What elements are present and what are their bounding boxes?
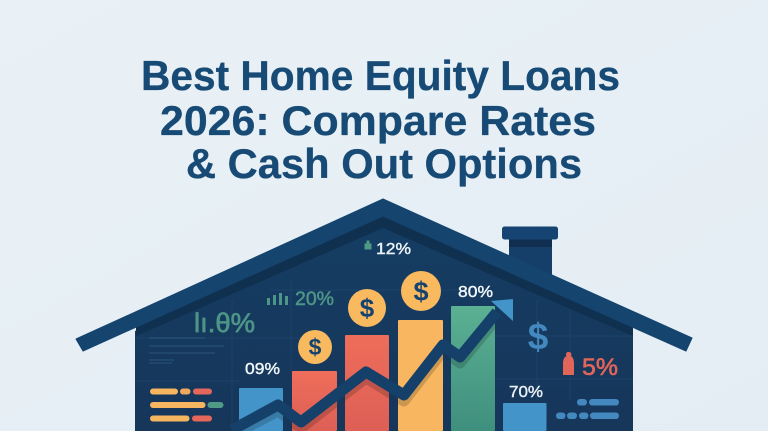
right pill rows [556,399,619,419]
bar: red tall [345,335,389,431]
bar: green [451,306,495,431]
bar chart [239,306,546,431]
roof [76,199,692,351]
stat: 12% with icon: 12% [376,241,411,258]
stat: 5% with icon [563,352,618,381]
trend line [232,312,497,430]
label 80%: 80% [458,284,493,301]
house wall [135,212,633,431]
stat: 5% with icon: 5% [582,354,618,381]
title: Best Home Equity Loans [141,52,620,99]
title: 2026: Compare Rates [160,97,596,144]
bar: yellow [398,320,443,431]
stat: 1.0%: lı.θ% [194,308,255,338]
label 70%: 70% [509,384,543,401]
dollar coin medium: $ [360,293,375,323]
trend line shadow [240,318,497,431]
icon: blue dollar: $ [528,316,549,357]
dollar coin large: $ [413,276,429,306]
stat: 20% with mini bars [267,289,334,310]
dollar coin small: $ [309,334,322,360]
dollar coin medium [348,289,386,327]
dollar coin small [298,330,332,364]
infographic canvas [76,59,692,431]
wall grid lines [135,280,633,431]
left pill rows [150,388,224,422]
left text lines [149,338,224,363]
label 09%: 09% [245,361,280,378]
stat: 20% with mini bars: 20% [295,289,334,310]
title [141,52,620,187]
bar: blue [239,388,283,431]
bar: blue small [503,403,546,431]
house illustration [76,199,692,431]
trend arrow head [491,299,513,321]
bar: red short [292,371,337,431]
stat: 12% with icon [365,241,411,258]
title: & Cash Out Options [186,140,582,187]
dollar coin large [401,271,441,311]
chimney [502,226,558,295]
roof shadow [136,207,633,336]
